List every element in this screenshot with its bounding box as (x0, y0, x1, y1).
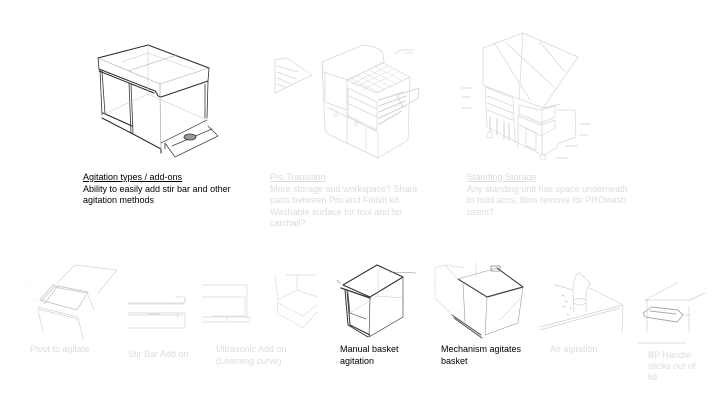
label: stir bar add on: Stir Bar Add on (128, 349, 189, 359)
text: pro transition: Washable surface for tool and bp (270, 206, 402, 216)
sketch: mechanism agitates basket (435, 263, 523, 338)
label: BP handle: sticks out of (648, 361, 696, 371)
sketch: basket frame (275, 275, 317, 328)
label: mechanism agitates basket (441, 344, 521, 366)
sketch: ultrasonic add on (202, 285, 250, 322)
text: standing storage: Any standing unit has space underneath (467, 184, 628, 194)
label: BP handle: BP Handle (648, 350, 691, 360)
text: pro transition (270, 172, 418, 228)
sketch: standing storage (462, 33, 590, 160)
sketch: stir bar add on (128, 297, 185, 328)
text: agitation types (83, 172, 231, 205)
sketch: BP handle (638, 283, 705, 343)
sketch: agitation unit (98, 45, 218, 157)
label: manual basket agitation: Manual basket (340, 344, 399, 354)
text: standing storage: Standing Storage (467, 172, 537, 182)
label: BP handle: lid (648, 372, 657, 382)
text: pro transition: Pro Transition (270, 172, 326, 182)
label: manual basket agitation: agitation (340, 356, 374, 366)
text: pro transition: More storage and workspace? Share (270, 184, 418, 194)
sketch: air agitation (540, 273, 623, 332)
label: pivot to agitate: Pivot to agitate (30, 344, 90, 354)
text: standing storage: users? (467, 206, 494, 216)
text: agitation types: agitation methods (83, 195, 154, 205)
text: pro transition: parts between Pro and Finish kit. (270, 195, 401, 205)
text: pro transition: catchall? (270, 218, 306, 228)
label: mechanism agitates basket: basket (441, 356, 468, 366)
label: ultrasonic add on: Ultrasonic Add on (216, 344, 287, 354)
text: agitation types: Agitation types / add-ons (83, 172, 182, 182)
sketch: manual basket (337, 265, 416, 337)
text: agitation types: Ability to easily add stir bar and other (83, 184, 231, 194)
label: BP handle (648, 350, 696, 382)
sketch: pro transition (275, 45, 419, 158)
label: manual basket agitation (340, 344, 399, 366)
label: ultrasonic add on (216, 344, 287, 366)
sketch: pivot to agitate (29, 265, 117, 338)
text: standing storage (467, 172, 628, 216)
label: air agitation: Air agitation (550, 344, 598, 354)
text: standing storage: to hold accs. Bins remove for PROwash (467, 195, 626, 205)
label: mechanism agitates basket: Mechanism agitates (441, 344, 521, 354)
label: ultrasonic add on: (Learning curve) (216, 356, 282, 366)
